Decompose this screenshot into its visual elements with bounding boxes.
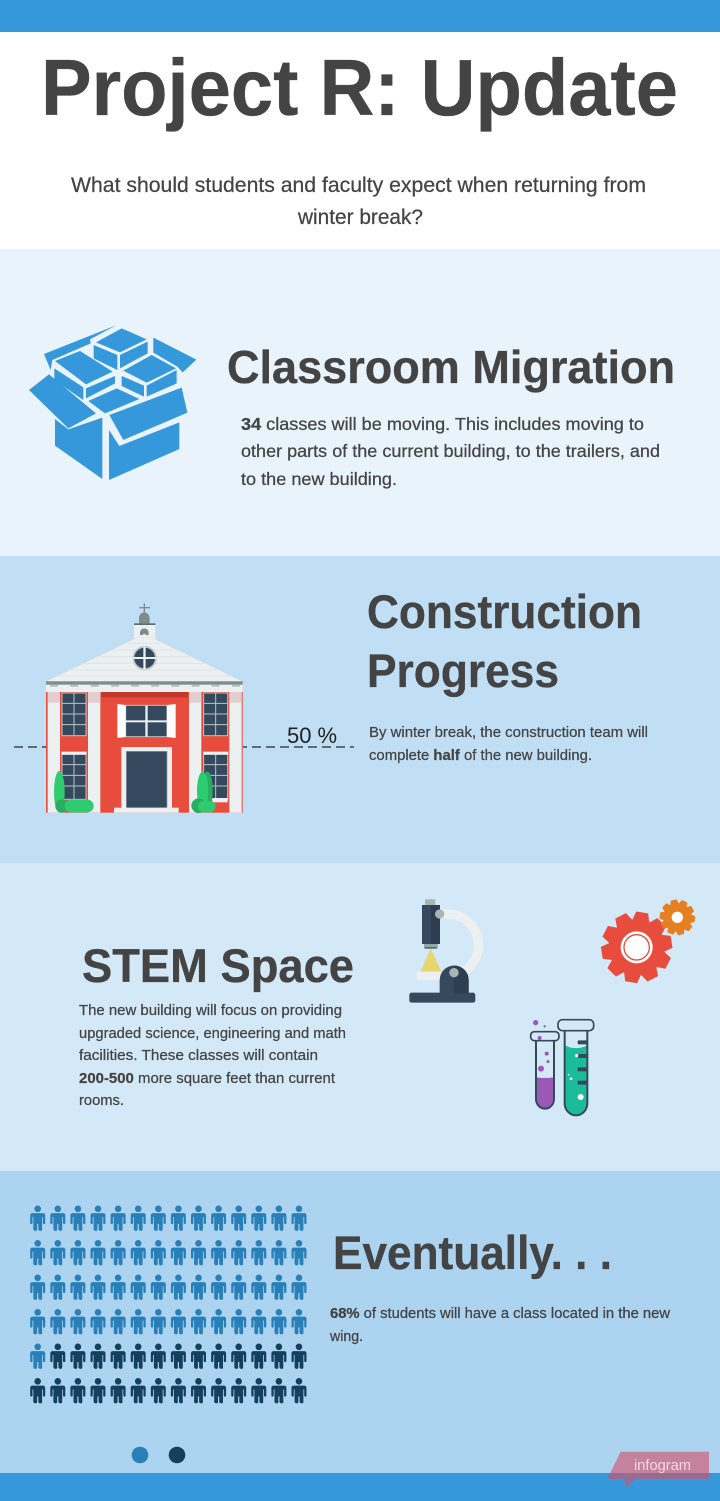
panel: classroom migration <box>0 249 720 556</box>
header panel <box>0 32 720 249</box>
body text: rooms. <box>79 1092 124 1109</box>
infogram badge: infogram <box>634 1457 691 1474</box>
bushes <box>54 771 216 813</box>
body text: 200-500 more square feet than current <box>79 1070 336 1087</box>
body text: The new building will focus on providing <box>79 1002 342 1019</box>
subtitle: winter break? <box>297 205 423 229</box>
door <box>114 747 179 813</box>
heading: Classroom Migration <box>227 341 675 393</box>
icons: science <box>409 897 697 1115</box>
icon: microscope <box>409 899 479 1003</box>
body text <box>369 724 648 764</box>
body text: upgraded science, engineering and math <box>79 1025 346 1042</box>
heading <box>367 585 642 697</box>
subtitle <box>71 173 646 229</box>
body text: 68% of students will have a class located in the new <box>330 1306 671 1322</box>
body text: facilities. These classes will contain <box>79 1047 318 1064</box>
bottom bar <box>0 1473 720 1501</box>
panel: construction progress <box>0 556 720 863</box>
body text: complete half of the new building. <box>369 747 592 764</box>
panel: eventually <box>0 1171 720 1473</box>
body text <box>79 1002 346 1109</box>
body text <box>329 1306 671 1345</box>
legend dots <box>132 1447 185 1463</box>
subtitle: What should students and faculty expect when returning from <box>71 173 646 197</box>
body text: wing. <box>329 1329 363 1345</box>
body text: to the new building. <box>241 469 397 489</box>
body text: other parts of the current building, to the trailers, and <box>241 441 660 461</box>
heading: Eventually. . . <box>333 1226 612 1279</box>
50 percent dashed line: 50 % <box>287 723 337 748</box>
pictogram: 68 percent of students <box>30 1206 306 1403</box>
icon: building <box>46 603 243 813</box>
heading: Construction <box>367 585 642 638</box>
panel: STEM space <box>0 863 720 1171</box>
windows <box>61 693 228 802</box>
icon: moving box <box>29 325 196 480</box>
heading: STEM Space <box>82 939 354 992</box>
heading: Progress <box>367 644 559 697</box>
body text: By winter break, the construction team will <box>369 724 648 741</box>
top bar <box>0 0 720 32</box>
body text <box>241 414 660 489</box>
icon: test tubes <box>531 1020 594 1115</box>
title: Project R: Update <box>41 43 678 132</box>
icon: gears <box>596 897 697 989</box>
body text: 34 classes will be moving. This includes moving to <box>241 414 644 434</box>
infogram badge <box>607 1452 709 1488</box>
